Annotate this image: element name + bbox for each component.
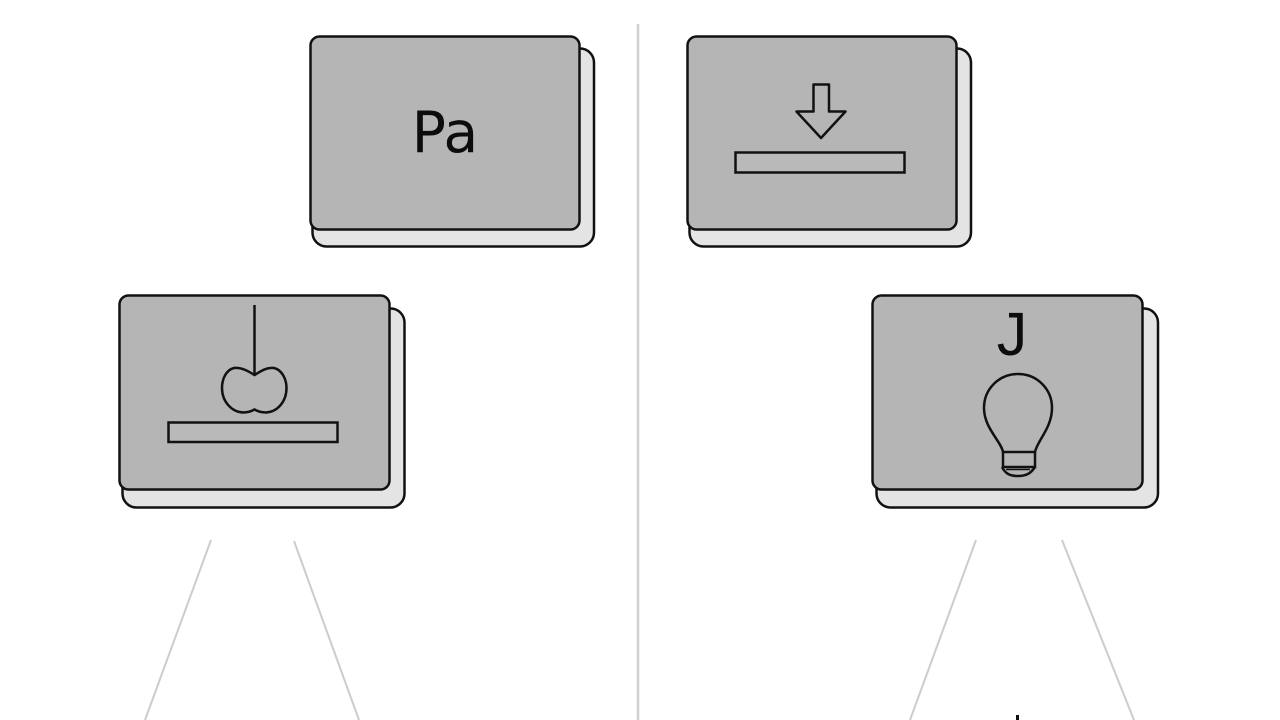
label: Pa: Pa: [412, 100, 478, 166]
card: pascal unit Pa: [310, 36, 594, 246]
funnel lines: right: [910, 540, 1134, 720]
icon: surface bar: [736, 152, 904, 172]
card: force on a surface: [688, 36, 971, 246]
icon: string: [253, 305, 256, 374]
icon: light bulb: [984, 374, 1052, 476]
funnel lines: left: [145, 540, 359, 720]
card: joule unit with light bulb: [872, 296, 1158, 508]
card: apple falling on a surface: [120, 296, 404, 508]
icon: surface bar: [168, 422, 338, 442]
label: J: J: [997, 300, 1027, 368]
icon: apple: [222, 368, 286, 412]
cropped tick at bottom edge: [1016, 715, 1019, 720]
icon: down arrow: [796, 84, 846, 138]
